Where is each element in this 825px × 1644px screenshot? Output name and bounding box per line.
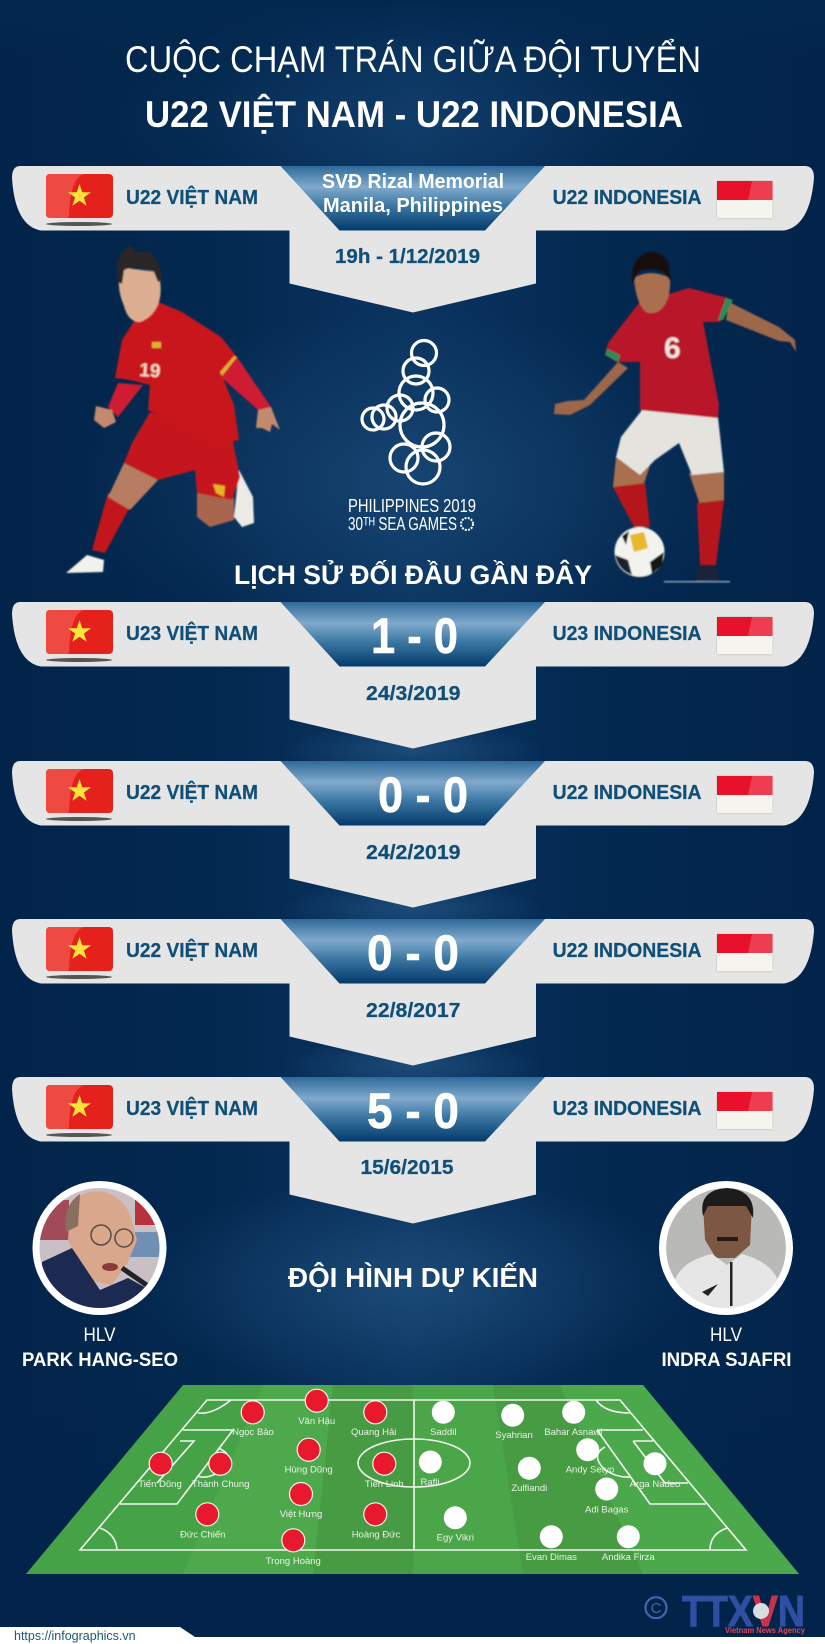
flag: Vietnam [46, 174, 113, 226]
panel: match 22/8/2017 [12, 919, 814, 1066]
player names: Saddil [430, 1427, 457, 1438]
player names: Zulfiandi [511, 1483, 547, 1494]
logo caption [348, 496, 476, 534]
coach caption: Park Hang-seo [22, 1325, 178, 1371]
team name left: U22 VIỆT NAM [126, 938, 258, 962]
flag: Indonesia [716, 933, 774, 972]
flag: Indonesia [716, 180, 774, 220]
flag: Indonesia [716, 616, 774, 656]
flag: Vietnam [46, 927, 113, 979]
team name right: U22 INDONESIA [553, 940, 702, 962]
flag: Vietnam [46, 769, 113, 821]
player names: Bahar Asnawi [544, 1427, 602, 1438]
player names: Hoàng Đức [352, 1530, 401, 1540]
score: 0 - 0 [378, 767, 468, 823]
football [614, 527, 664, 577]
flag: Vietnam [46, 1085, 113, 1137]
coach caption: Park Hang-seo: HLV [84, 1325, 116, 1346]
flag: Indonesia [716, 1091, 774, 1130]
match date: 24/2/2019 [366, 842, 460, 864]
player names: Syahrian [495, 1430, 533, 1441]
player names: Tiến Dũng [138, 1479, 182, 1490]
player names: Rafli [420, 1477, 440, 1488]
coach caption: Indra Sjafri [662, 1325, 792, 1371]
heading: recent history: LỊCH SỬ ĐỐI ĐẦU GẦN ĐÂY [234, 558, 592, 590]
venue [322, 171, 504, 217]
match date: 15/6/2015 [360, 1157, 454, 1179]
logo caption: 30ᵀᴴ SEA GAMES [348, 514, 457, 534]
panel: match 24/3/2019 [12, 602, 814, 748]
team name right: U22 INDONESIA [553, 782, 702, 804]
panel: match 24/2/2019 [12, 761, 814, 908]
copyright mark [646, 1597, 666, 1618]
portrait: Indra Sjafri [659, 1181, 793, 1315]
coach caption: Park Hang-seo: PARK HANG-SEO [22, 1350, 178, 1371]
team name left: U23 VIỆT NAM [126, 621, 258, 645]
Vietnam lineup [149, 1389, 396, 1552]
coach caption: Indra Sjafri: HLV [710, 1325, 742, 1346]
player names: Trọng Hoàng [266, 1556, 321, 1567]
match date: 24/3/2019 [366, 683, 460, 705]
team name right: U23 INDONESIA [553, 623, 702, 645]
panel: match info banner [12, 166, 814, 312]
player names: Quang Hải [351, 1427, 396, 1438]
heading: expected lineup: ĐỘI HÌNH DỰ KIẾN [288, 1261, 538, 1293]
logo: TTXVN: Vietnam News Agency [725, 1626, 806, 1635]
footer strip [0, 1627, 825, 1644]
player names: Thành Chung [192, 1479, 249, 1490]
player names: Việt Hưng [280, 1509, 322, 1520]
Indonesia lineup [419, 1401, 666, 1548]
player: Vietnam: 19 [139, 360, 161, 382]
player names: Văn Hậu [298, 1416, 335, 1427]
venue: SVĐ Rizal Memorial [322, 171, 504, 193]
portrait: Park Hang-seo [32, 1181, 166, 1315]
flag: Indonesia [716, 775, 774, 814]
football pitch [26, 1385, 799, 1574]
player names: Tiến Linh [365, 1479, 404, 1490]
flag: Vietnam [46, 610, 113, 662]
score: 0 - 0 [367, 925, 459, 981]
match date: 19h - 1/12/2019 [335, 246, 480, 268]
logo: SEA Games rings [362, 340, 450, 484]
team name right: U22 INDONESIA [553, 187, 702, 209]
title: U22 VIỆT NAM - U22 INDONESIA [145, 93, 683, 135]
player names: Đức Chiến [180, 1530, 225, 1540]
title [125, 38, 701, 135]
player names: Ngọc Bảo [232, 1427, 274, 1438]
copyright mark: C [651, 1600, 662, 1617]
player: Indonesia: 6 [664, 332, 681, 365]
team name left: U22 VIỆT NAM [126, 185, 258, 209]
player names: Arga Nadeo [630, 1479, 680, 1490]
score: 5 - 0 [367, 1083, 459, 1139]
team name left: U22 VIỆT NAM [126, 780, 258, 804]
team name left: U23 VIỆT NAM [126, 1096, 258, 1120]
player names: Andika Firza [602, 1552, 655, 1563]
logo caption: PHILIPPINES 2019 [348, 496, 476, 516]
player names: Hùng Dũng [285, 1464, 333, 1476]
player: Indonesia [554, 252, 796, 582]
source url: https://infographics.vn [14, 1629, 136, 1643]
player names: Egy Vikri [437, 1532, 474, 1544]
score: 1 - 0 [371, 608, 458, 664]
logo: TTXVN: TTXVN [682, 1587, 805, 1636]
team name right: U23 INDONESIA [553, 1098, 702, 1120]
panel: match 15/6/2015 [12, 1077, 814, 1224]
coach caption: Indra Sjafri: INDRA SJAFRI [662, 1350, 792, 1371]
player names: Adi Bagas [585, 1504, 629, 1516]
venue: Manila, Philippines [323, 195, 503, 217]
match date: 22/8/2017 [366, 1000, 460, 1022]
player names [138, 1416, 680, 1567]
player: Vietnam [66, 245, 280, 573]
player names: Evan Dimas [526, 1552, 577, 1563]
player names: Andy Setyo [566, 1464, 614, 1476]
title: CUỘC CHẠM TRÁN GIỮA ĐỘI TUYỂN [125, 38, 701, 80]
